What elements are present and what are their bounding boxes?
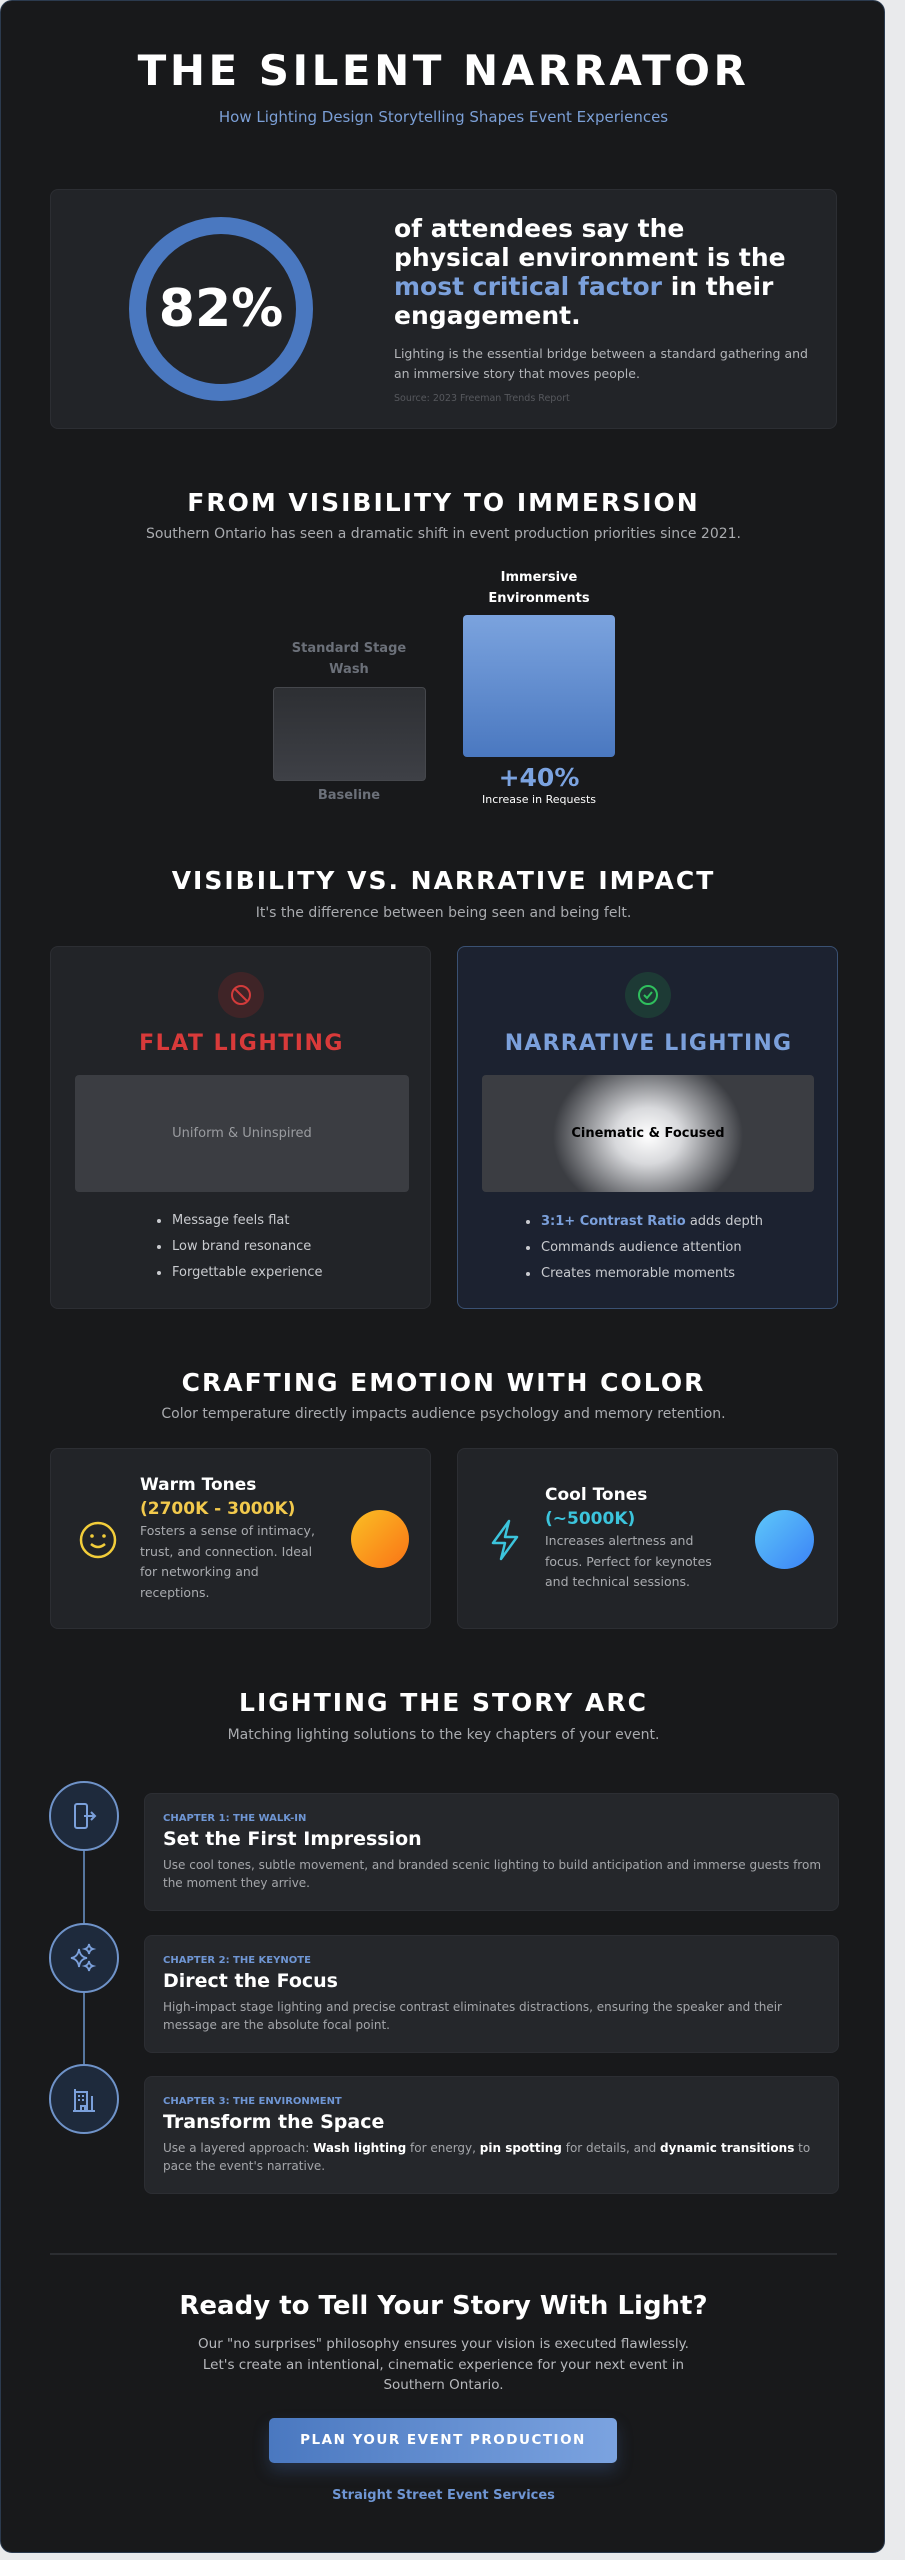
text: (~5000K) [545, 1509, 635, 1529]
bullet list: Forgettable experience [172, 1265, 323, 1280]
ring chart: 82% [129, 217, 313, 401]
icon: check [625, 972, 671, 1018]
bullet list [157, 1213, 323, 1280]
CTA button: PLAN YOUR EVENT PRODUCTION [300, 2432, 586, 2448]
card: chapter 2: Direct the Focus [163, 1970, 338, 1992]
bar caption: Increase in Requests [482, 793, 596, 806]
card: chapter 1: Set the First Impression [163, 1828, 422, 1850]
heading: NARRATIVE LIGHTING [505, 1031, 792, 1056]
heading: FLAT LIGHTING [139, 1031, 344, 1056]
bullet list: Message feels flat [172, 1213, 289, 1228]
icon: ban [218, 972, 264, 1018]
card: chapter 3: Use a layered approach: Wash lighting for energy, pin spotting for details, and dynamic transitions to pace the event's narrative. [163, 2141, 810, 2173]
stat headline: engagement. [394, 301, 581, 330]
bullet list: Commands audience attention [541, 1240, 742, 1255]
demo box: Uniform & Uninspired [172, 1126, 312, 1141]
heading: from visibility: FROM VISIBILITY TO IMMERSION [187, 488, 700, 517]
text: (2700K - 3000K) [140, 1499, 295, 1519]
subheading: It's the difference between being seen and being felt. [256, 905, 631, 921]
text [545, 1485, 712, 1589]
text: Fosters a sense of intimacy, trust, and connection. Ideal for networking and receptions. [140, 1523, 315, 1600]
stat description: Lighting is the essential bridge between a standard gathering and an immersive story that moves people. [394, 346, 808, 381]
panel: cool tones [457, 1448, 838, 1629]
panel: flat lighting [50, 946, 431, 1309]
color swatch: warm [351, 1510, 409, 1568]
heading: story arc: LIGHTING THE STORY ARC [239, 1688, 648, 1717]
panel: warm tones [50, 1448, 431, 1629]
heading: visibility vs narrative: VISIBILITY VS. NARRATIVE IMPACT [172, 866, 715, 895]
timeline [49, 1781, 839, 2194]
bar label: standard: Standard Stage [292, 641, 406, 656]
card: chapter 3: Transform the Space [163, 2111, 384, 2133]
CTA paragraph: Let's create an intentional, cinematic experience for your next event in [203, 2356, 684, 2372]
icon: walk-in [49, 1781, 119, 1851]
bullet list: 3:1+ Contrast Ratio adds depth [541, 1214, 763, 1229]
title: THE SILENT NARRATOR [138, 46, 749, 95]
stat headline: most critical factor in their [394, 272, 773, 301]
CTA paragraph: Southern Ontario. [383, 2377, 504, 2393]
CTA heading: Ready to Tell Your Story With Light? [179, 2291, 708, 2321]
bar label: immersive: Immersive [501, 570, 577, 585]
source: Source: 2023 Freeman Trends Report [394, 393, 570, 404]
card: chapter 2 [144, 1935, 839, 2053]
icon: smiley [80, 1522, 116, 1558]
bar label: standard: Wash [329, 662, 369, 677]
card: chapter 2: High-impact stage lighting and precise contrast eliminates distractions, ensuring the speaker and their message are the absolute focal point. [163, 2000, 782, 2032]
bullet list: Low brand resonance [172, 1239, 311, 1254]
panel: narrative lighting [457, 946, 838, 1309]
heading: color: CRAFTING EMOTION WITH COLOR [182, 1368, 705, 1397]
bar label: standard [292, 641, 406, 677]
subheading: Matching lighting solutions to the key chapters of your event. [228, 1727, 659, 1743]
demo box [75, 1075, 409, 1192]
card: chapter 3: CHAPTER 3: THE ENVIRONMENT [163, 2096, 342, 2107]
stat headline [394, 214, 786, 330]
bar label: immersive [488, 570, 590, 606]
bullet list [526, 1214, 763, 1281]
icon: building [49, 2064, 119, 2134]
CTA button [269, 2418, 617, 2463]
icon: sparkles [49, 1923, 119, 1993]
bar caption: baseline: Baseline [318, 788, 380, 803]
subheading: Southern Ontario has seen a dramatic shift in event production priorities since 2021. [146, 526, 741, 542]
CTA paragraph: Our "no surprises" philosophy ensures your vision is executed flawlessly. [198, 2336, 689, 2352]
subheading: Color temperature directly impacts audience psychology and memory retention. [161, 1406, 726, 1422]
subtitle: How Lighting Design Storytelling Shapes Event Experiences [219, 108, 668, 126]
card: chapter 1: Use cool tones, subtle movement, and branded scenic lighting to build anticipation and immerse guests from the moment they arrive. [163, 1858, 821, 1890]
bar chart [273, 570, 615, 806]
stat headline: of attendees say the [394, 214, 684, 243]
text [140, 1475, 315, 1600]
bar: standard [273, 687, 426, 781]
bullet list: Creates memorable moments [541, 1266, 735, 1281]
color swatch: cool [755, 1510, 814, 1569]
CTA paragraph [198, 2336, 689, 2393]
card: chapter 1: CHAPTER 1: THE WALK-IN [163, 1813, 306, 1824]
card: chapter 3 [144, 2076, 839, 2194]
panel: key stat [50, 189, 837, 429]
icon: lightning [492, 1520, 518, 1560]
card: chapter 1 [144, 1793, 839, 1911]
footer brand: Straight Street Event Services [332, 2488, 555, 2503]
bar: immersive [463, 615, 615, 757]
text: Increases alertness and focus. Perfect for keynotes and technical sessions. [545, 1533, 712, 1589]
bar label: immersive: Environments [488, 591, 590, 606]
+40% stat: +40% [499, 763, 579, 792]
stat headline: physical environment is the [394, 243, 786, 272]
stat number: 82% [159, 279, 283, 339]
demo box: Cinematic & Focused [571, 1126, 725, 1141]
card: chapter 2: CHAPTER 2: THE KEYNOTE [163, 1955, 311, 1966]
text: Cool Tones [545, 1485, 647, 1505]
text: Warm Tones [140, 1475, 256, 1495]
demo box [482, 1075, 814, 1192]
